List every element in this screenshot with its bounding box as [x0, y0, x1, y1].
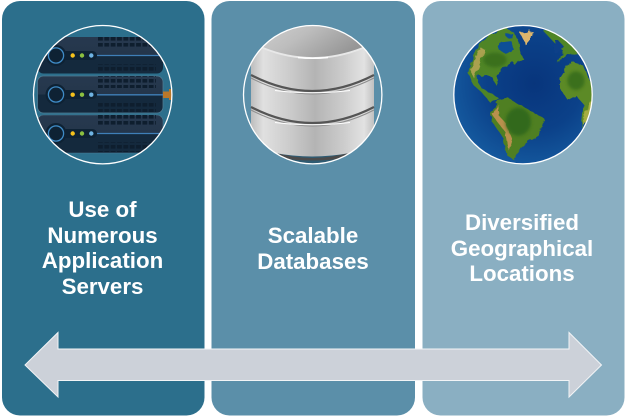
heading: geographical locations: Diversified — [465, 210, 579, 235]
panel: geographical locations — [422, 1, 624, 416]
heading: scalable databases: Databases — [257, 249, 369, 274]
panel: scalable databases — [212, 1, 415, 416]
arrow: double-headed — [25, 332, 602, 397]
icon: database cylinder — [244, 15, 382, 166]
heading: scalable databases: Scalable — [268, 223, 358, 248]
panel: application servers — [2, 1, 204, 416]
heading: geographical locations: Locations — [469, 261, 575, 286]
heading: geographical locations: Geographical — [451, 236, 593, 261]
heading: application servers: Application — [42, 248, 163, 273]
icon: globe — [453, 25, 593, 165]
heading: application servers: Numerous — [47, 223, 158, 248]
heading: application servers: Servers — [62, 274, 143, 299]
icon: server rack — [34, 26, 174, 164]
heading: application servers: Use of — [68, 197, 137, 222]
